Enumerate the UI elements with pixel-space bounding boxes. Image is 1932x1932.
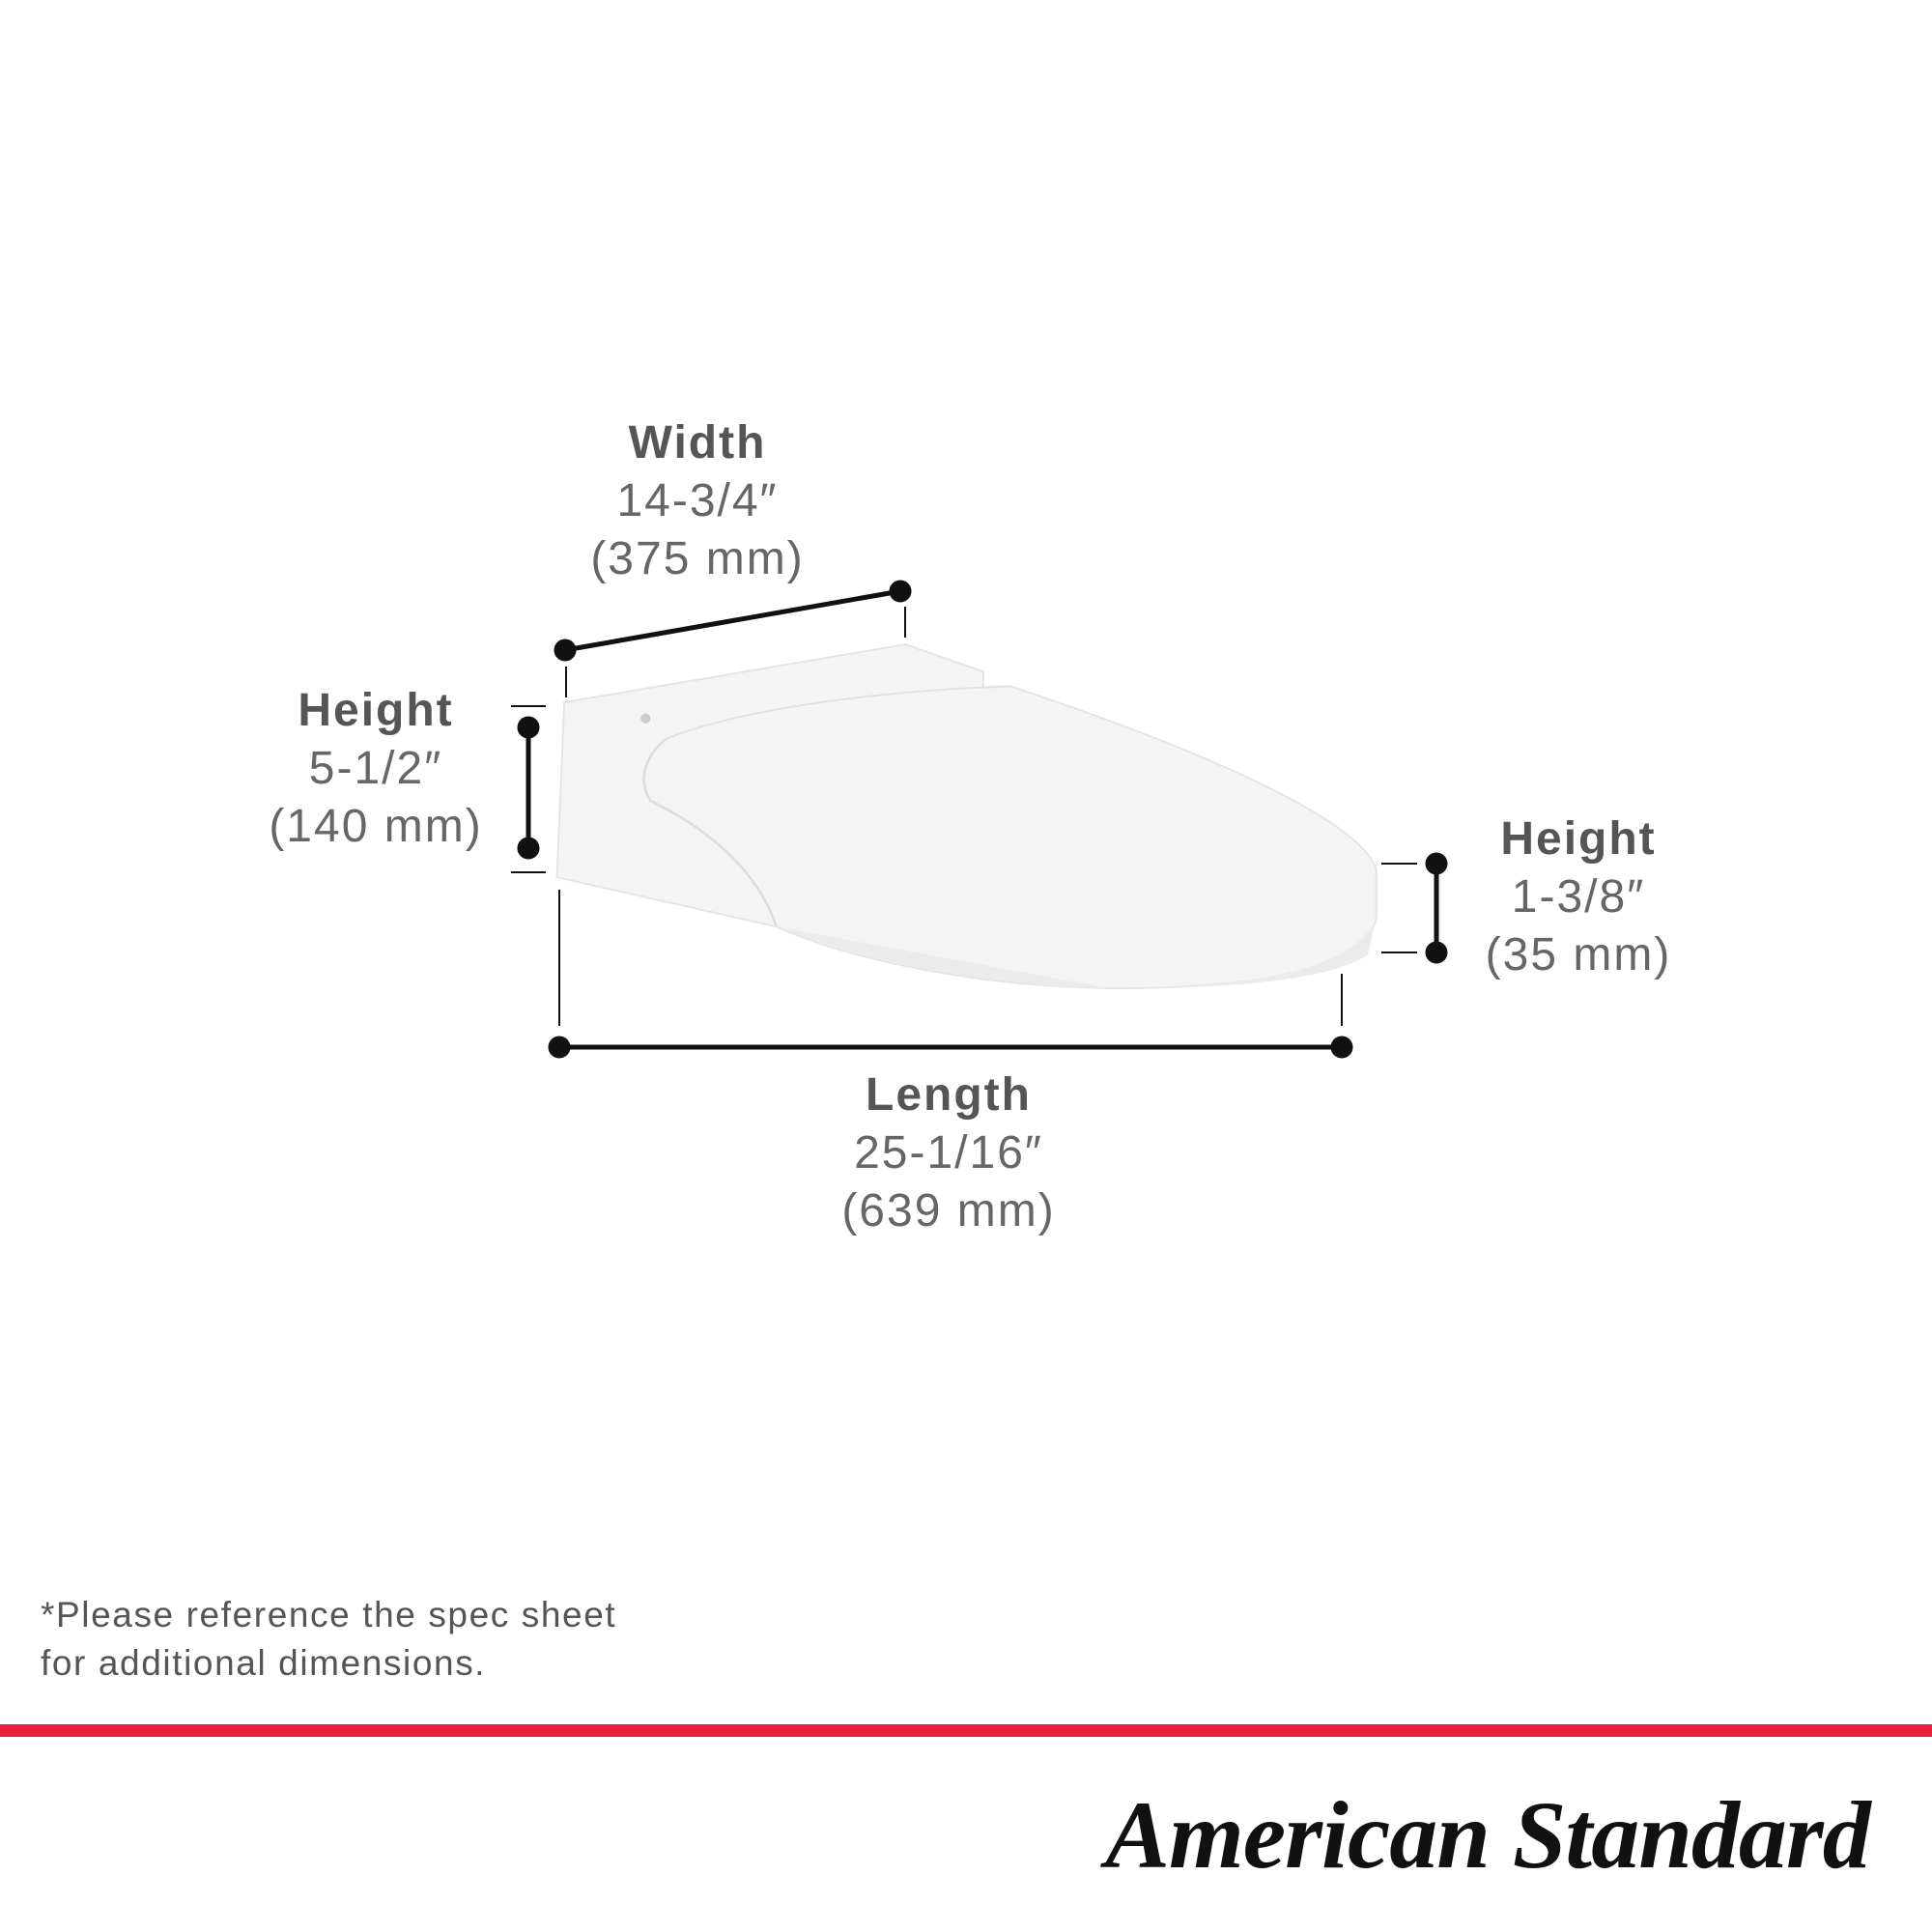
label: length: Length — [866, 1069, 1032, 1121]
label: left height: (140 mm) — [269, 801, 483, 852]
label: right height: Height — [1500, 813, 1657, 865]
label: right height: (35 mm) — [1486, 929, 1671, 980]
dimension: length — [551, 890, 1350, 1056]
label: length — [841, 1069, 1056, 1236]
label: width: Width — [629, 417, 766, 469]
footnote — [41, 1595, 616, 1683]
logo: American Standard: American Standard — [1105, 1781, 1870, 1889]
label: right height — [1486, 813, 1671, 980]
seat illustration — [557, 644, 1377, 988]
footnote: *Please reference the spec sheet — [41, 1595, 616, 1634]
red divider — [0, 1724, 1932, 1737]
dimension: width — [556, 582, 909, 697]
label: left height — [269, 685, 483, 852]
label: left height: Height — [298, 685, 454, 736]
label: width: 14-3/4″ — [616, 475, 779, 526]
label: length: 25-1/16″ — [854, 1127, 1043, 1179]
label: left height: 5-1/2″ — [309, 743, 442, 794]
label: right height: 1-3/8″ — [1512, 871, 1645, 923]
label: length: (639 mm) — [841, 1185, 1056, 1236]
dimension: left height — [511, 706, 546, 872]
footnote: for additional dimensions. — [41, 1643, 486, 1683]
label: width: (375 mm) — [590, 533, 805, 584]
label: width — [590, 417, 805, 584]
dimension: right height — [1381, 855, 1445, 961]
